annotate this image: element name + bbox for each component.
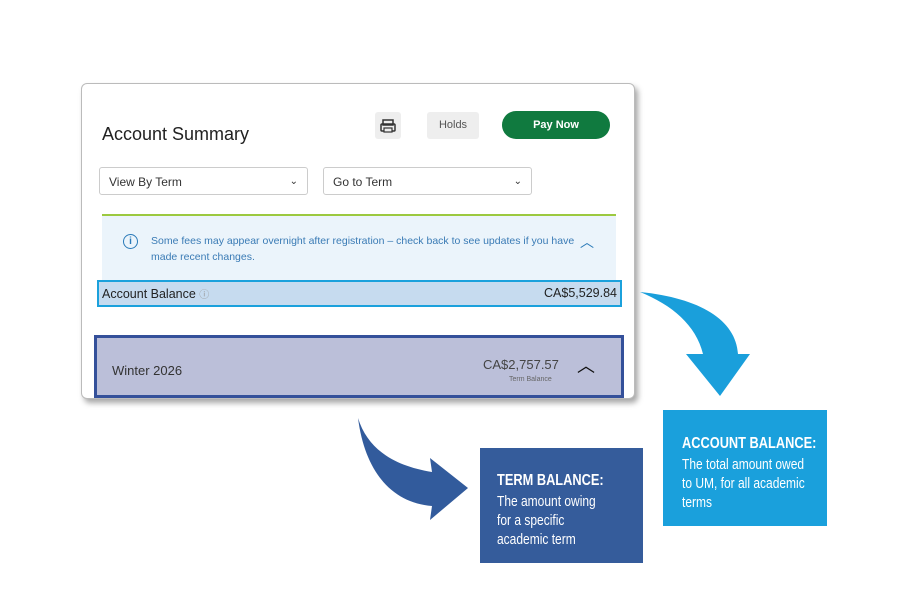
row: Winter 2026 term highlighted xyxy=(94,335,624,398)
button: Holds xyxy=(427,112,479,139)
button: Pay Now xyxy=(502,111,610,139)
callout: term balance: for a specific xyxy=(497,512,564,529)
row: Account Balance highlighted: CA$5,529.84 xyxy=(544,286,617,300)
callout: account balance: The total amount owed xyxy=(682,456,804,473)
dropdown: Go to Term xyxy=(323,167,532,195)
text: notice: Some fees may appear overnight after registration – check back to see updates if you have made recent changes. xyxy=(151,235,574,263)
callout: term balance: TERM BALANCE: xyxy=(497,472,604,489)
icon: info: i xyxy=(129,236,132,247)
icon: info xyxy=(123,234,138,249)
panel: account summary card xyxy=(81,83,635,399)
dropdown: View By Term: View By Term xyxy=(109,175,182,189)
callout: term balance xyxy=(480,448,643,563)
callout: account balance: ACCOUNT BALANCE: xyxy=(682,435,816,452)
heading: Account Summary: Account Summary xyxy=(102,124,249,144)
row: Account Balance highlighted xyxy=(97,280,622,307)
notice: fees info: ︿ xyxy=(580,234,594,250)
row: Account Balance highlighted: Account Balance ⓘ xyxy=(102,287,209,301)
row: Winter 2026 term highlighted: Winter 2026 xyxy=(112,363,182,378)
callout: account balance: terms xyxy=(682,494,712,511)
button: Holds: Holds xyxy=(439,119,467,131)
callout: term balance: academic term xyxy=(497,531,576,548)
icon: print button xyxy=(375,112,401,139)
callout: term balance: The amount owing xyxy=(497,493,596,510)
dropdown: Go to Term: Go to Term xyxy=(333,175,392,189)
row: Winter 2026 term highlighted: CA$2,757.57 xyxy=(483,357,559,372)
dropdown: Go to Term: ⌄ xyxy=(514,176,522,187)
dropdown: View By Term xyxy=(99,167,308,195)
row: Winter 2026 term highlighted: Term Balance xyxy=(509,376,552,383)
dropdown: View By Term: ⌄ xyxy=(290,176,298,187)
callout: account balance: to UM, for all academic xyxy=(682,475,805,492)
notice: fees info xyxy=(102,214,616,280)
button: Pay Now: Pay Now xyxy=(533,119,579,131)
row: Winter 2026 term highlighted: ︿ xyxy=(577,356,595,376)
callout: account balance xyxy=(663,410,827,526)
